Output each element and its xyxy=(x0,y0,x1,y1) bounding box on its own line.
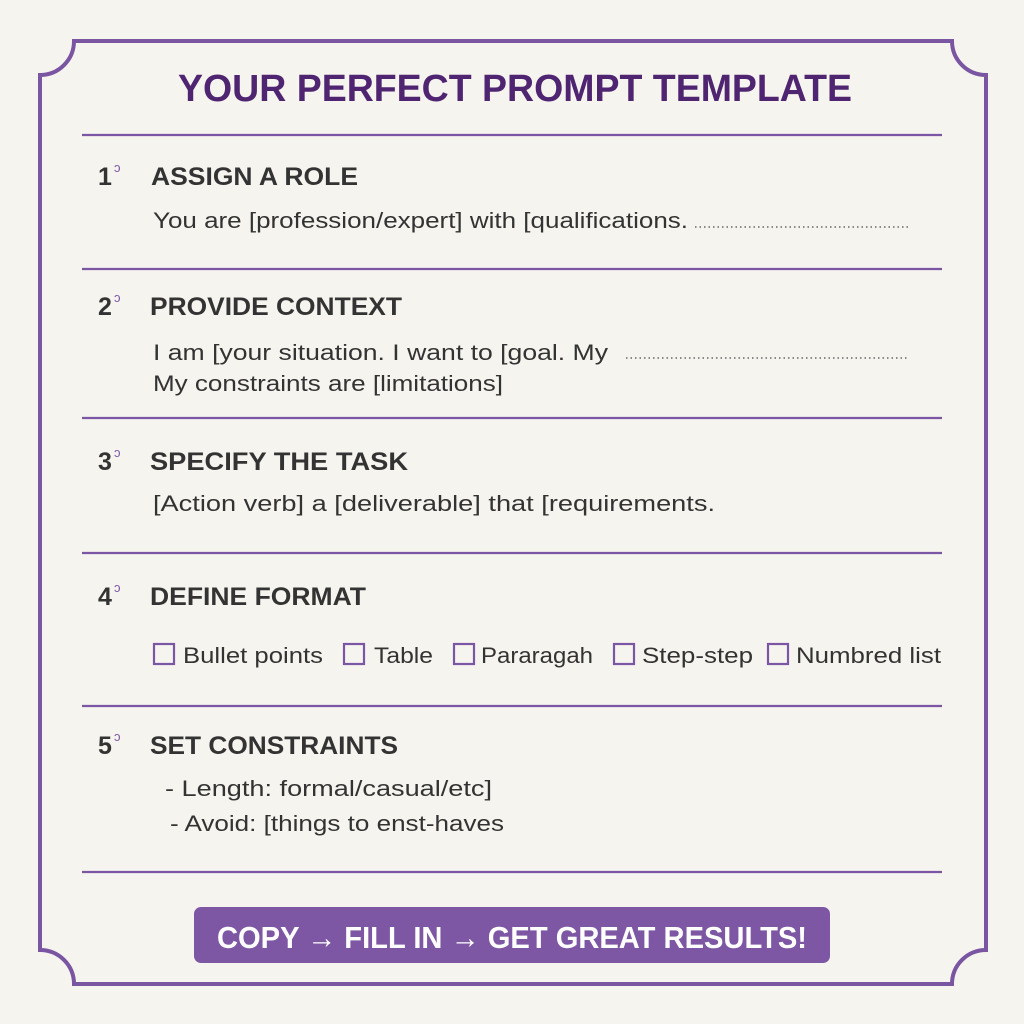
section 4: define format: Pararagah xyxy=(481,643,593,668)
section 2: provide context: 2 xyxy=(98,293,112,321)
section 5: set constraints: 5 xyxy=(98,732,112,760)
section 1: assign a role: ↄ xyxy=(114,160,120,175)
section 4: define format: Bullet points xyxy=(183,643,323,668)
section 5: set constraints: - Length: formal/casual/etc] xyxy=(165,776,492,801)
section 1: assign a role: 1 xyxy=(98,163,112,191)
section 4: define format: Numbred list xyxy=(796,643,941,668)
section 1: assign a role xyxy=(98,160,910,233)
button: copy fill in get great results xyxy=(194,907,830,963)
title: YOUR PERFECT PROMPT TEMPLATE xyxy=(178,68,852,110)
section 4: define format: ↄ xyxy=(114,580,120,595)
section 4: define format: Step-step xyxy=(642,643,753,668)
section 1: assign a role: You are [profession/expert] with [qualifications. xyxy=(153,208,688,233)
section 5: set constraints: ↄ xyxy=(114,729,120,744)
section 3: specify the task: SPECIFY THE TASK xyxy=(150,448,408,476)
section 2: provide context: I am [your situation. I want to [goal. My xyxy=(153,340,608,365)
section 3: specify the task: 3 xyxy=(98,448,112,476)
section 4: define format: DEFINE FORMAT xyxy=(150,583,366,611)
section 4: define format xyxy=(98,580,941,668)
section 3: specify the task xyxy=(98,445,715,516)
section 5: set constraints: - Avoid: [things to enst-haves xyxy=(170,811,504,836)
button: copy fill in get great results: COPY → FILL IN → GET GREAT RESULTS! xyxy=(217,920,807,955)
section 5: set constraints xyxy=(98,729,504,836)
section 3: specify the task: [Action verb] a [deliverable] that [requirements. xyxy=(153,491,715,516)
section 2: provide context: My constraints are [limitations] xyxy=(153,371,503,396)
section 3: specify the task: ↄ xyxy=(114,445,120,460)
section 2: provide context xyxy=(98,290,908,396)
section 4: define format: Table xyxy=(374,643,433,668)
section 1: assign a role: ASSIGN A ROLE xyxy=(151,163,358,191)
section 2: provide context: PROVIDE CONTEXT xyxy=(150,293,402,321)
section 2: provide context: ↄ xyxy=(114,290,120,305)
section 5: set constraints: SET CONSTRAINTS xyxy=(150,732,398,760)
section 4: define format: 4 xyxy=(98,583,112,611)
